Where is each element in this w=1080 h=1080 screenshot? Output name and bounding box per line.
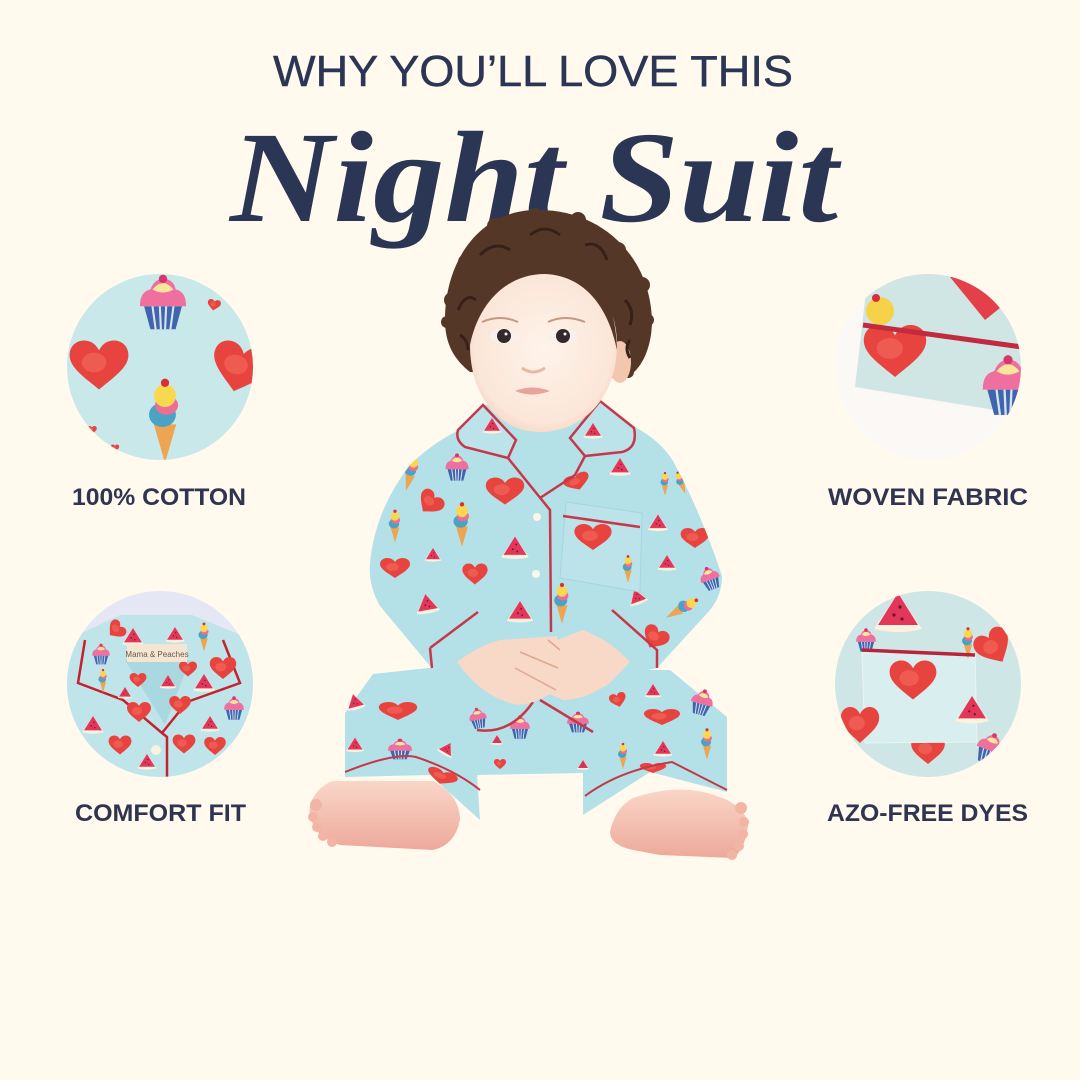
- heading: why you'll love this: WHY YOU’LL LOVE THIS: [273, 47, 793, 96]
- hair curl texture: [458, 229, 632, 358]
- brand tag: Mama & Peaches: [125, 650, 189, 659]
- panel: azo-free dyes: [827, 591, 1028, 827]
- panel: 100% cotton: [67, 274, 253, 505]
- child wearing night suit: [308, 208, 749, 860]
- shirt print: [380, 453, 723, 654]
- collar with red piping: [457, 401, 635, 458]
- title: night suit: Night Suit: [228, 106, 842, 250]
- trouser hem piping: [345, 756, 727, 796]
- label: COMFORT FIT: [75, 800, 246, 827]
- label: AZO-FREE DYES: [827, 800, 1028, 827]
- swatch: print with cupcake, hearts and ice cream: [67, 274, 253, 460]
- shirt hem piping: [477, 700, 593, 732]
- right foot: [610, 789, 749, 860]
- panel: comfort fit: [67, 591, 253, 827]
- face: [470, 272, 617, 432]
- placket piping and buttons: [508, 456, 585, 632]
- hair back: [441, 208, 654, 378]
- nose: [522, 368, 545, 372]
- shirt: [370, 401, 722, 732]
- front hair fringe: [470, 254, 617, 350]
- mouth: [515, 388, 550, 394]
- pocket: [560, 502, 642, 592]
- label: 100% COTTON: [72, 484, 246, 511]
- hands: [457, 630, 630, 705]
- left foot: [308, 781, 460, 850]
- panel: woven fabric: [828, 274, 1033, 511]
- label: WOVEN FABRIC: [828, 484, 1028, 511]
- right ear: [609, 341, 631, 383]
- swatch: shirt pocket: [835, 591, 1021, 777]
- swatch: collar with brand tag: [67, 591, 253, 777]
- swatch: sleeve cuff with red piping: [855, 274, 1021, 415]
- brand tag: [125, 644, 189, 662]
- eyes: [482, 318, 585, 343]
- pajama trousers: [345, 666, 727, 820]
- trouser print: [344, 684, 716, 789]
- cuff piping: [430, 610, 657, 668]
